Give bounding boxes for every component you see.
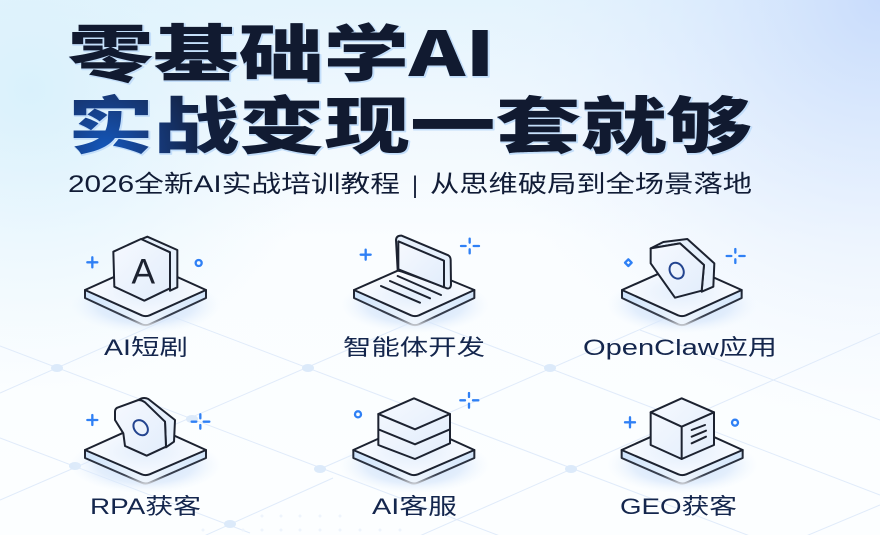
title line 2: 实战变现一套就够 [68, 76, 752, 166]
background network grid [0, 289, 880, 535]
label: 智能体开发: 智能体开发 [343, 335, 485, 360]
label: AI客服: AI客服 [372, 494, 457, 519]
item: GEO获客 [607, 398, 757, 519]
label: RPA获客: RPA获客 [90, 494, 201, 519]
item: 智能体开发 [340, 236, 490, 360]
subtitle: | [412, 172, 418, 199]
icon: hexagon A on platform: A [132, 252, 156, 291]
label: GEO获客: GEO获客 [620, 494, 737, 519]
label: AI短剧: AI短剧 [104, 335, 188, 360]
title line 2: 实战变现一套就够 [69, 77, 753, 167]
item: OpenClaw应用 [583, 239, 777, 360]
icon: claw block on platform [607, 239, 757, 333]
title line 1: 零基础学AI [69, 5, 496, 95]
title line 1: 零基础学AI [68, 4, 495, 94]
icon: cube with document on platform [607, 398, 757, 493]
title [68, 4, 753, 167]
icon: robot arm block on platform [71, 398, 221, 493]
icon: hexagon A on platform [71, 237, 221, 333]
item: RPA获客 [71, 398, 221, 519]
subtitle: 从思维破局到全场景落地 [430, 171, 752, 198]
item: AI客服 [339, 393, 489, 519]
icon: stacked layers on platform [339, 393, 489, 493]
icon: laptop on platform [340, 236, 490, 333]
subtitle [68, 171, 752, 199]
subtitle: 2026全新AI实战培训教程 [68, 171, 400, 198]
label: OpenClaw应用: OpenClaw应用 [583, 335, 777, 360]
item: AI短剧 [71, 237, 221, 360]
